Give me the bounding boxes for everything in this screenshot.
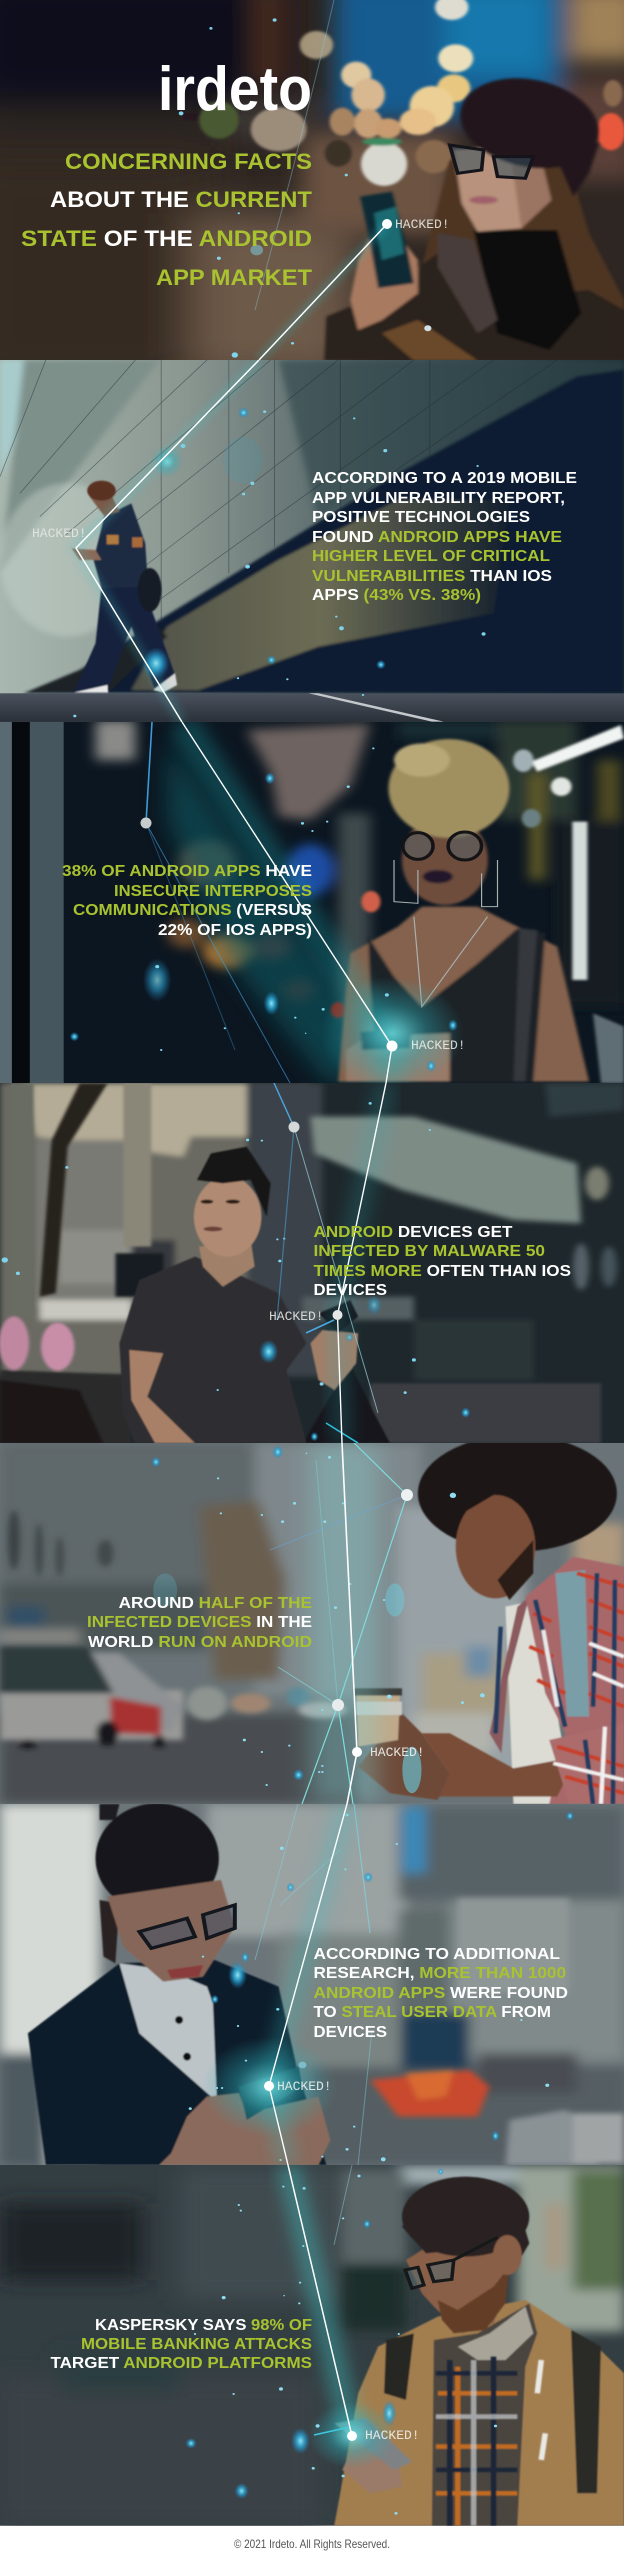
- fact text: MOBILE BANKING ATTACKS: [81, 2336, 312, 2353]
- fact text: ANDROID APPS WERE FOUND: [314, 1985, 568, 2002]
- fact text: POSITIVE TECHNOLOGIES: [312, 509, 530, 526]
- fact text: 38% OF ANDROID APPS HAVE: [62, 863, 312, 880]
- white network line: [342, 1443, 357, 1804]
- fact text: AROUND HALF OF THE: [119, 1595, 312, 1612]
- title: STATE OF THE ANDROID: [21, 226, 312, 251]
- fact text: APPS (43% VS. 38%): [312, 587, 481, 604]
- woman figure: [324, 64, 624, 361]
- hacked label: HACKED!: [32, 526, 87, 541]
- hacked label: HACKED!: [395, 217, 450, 232]
- glow: [308, 2402, 396, 2469]
- photo: woman in office: [0, 1803, 624, 2167]
- wall seams: [0, 360, 557, 620]
- fact text: ACCORDING TO ADDITIONAL: [314, 1946, 560, 1963]
- fact text: 22% OF IOS APPS): [158, 922, 312, 939]
- hacked label: HACKED!: [277, 2079, 332, 2094]
- white network line: [182, 722, 392, 1083]
- man figure: [119, 1147, 390, 1443]
- fact text: INFECTED DEVICES IN THE: [87, 1614, 312, 1631]
- fact text: KASPERSKY SAYS 98% OF: [95, 2317, 312, 2334]
- fact text: INSECURE INTERPOSES: [114, 883, 312, 900]
- node: [382, 219, 392, 229]
- secondary network lines: [255, 1804, 372, 2165]
- particles: [259, 1340, 278, 1364]
- fact text: INFECTED BY MALWARE 50: [314, 1243, 545, 1260]
- photo: woman at night with phone: [0, 0, 624, 387]
- photo: woman on night street: [0, 720, 624, 1090]
- fact text: FOUND ANDROID APPS HAVE: [312, 529, 562, 546]
- glow: [201, 2037, 337, 2137]
- panel: man with curly hair and coffee: [0, 1435, 624, 1804]
- fact text: DEVICES: [314, 1282, 387, 1299]
- fact text: ACCORDING TO A 2019 MOBILE: [312, 470, 577, 487]
- glow around phone node: [326, 980, 459, 1083]
- particles: [153, 448, 182, 476]
- white network line: [288, 2165, 352, 2436]
- title: APP MARKET: [156, 265, 313, 290]
- fact text: [62, 863, 312, 939]
- shirt plaid: [436, 2357, 545, 2526]
- hacked label: HACKED!: [269, 1309, 324, 1324]
- glow: [310, 1443, 378, 1803]
- logo: irdeto: [158, 55, 312, 124]
- secondary network lines: [270, 1443, 407, 1804]
- fact text: COMMUNICATIONS (VERSUS: [73, 902, 312, 919]
- fact text: [314, 1224, 571, 1299]
- photo: man walking: [0, 360, 624, 722]
- photo: bearded man with phone: [0, 2165, 624, 2527]
- fact text: [312, 470, 577, 604]
- fact text: RESEARCH, MORE THAN 1000: [314, 1965, 566, 1982]
- nodes: [140, 818, 398, 1052]
- glasses: [450, 145, 533, 178]
- secondary network lines: [274, 1083, 378, 1443]
- nodes: [332, 1489, 413, 1757]
- fact text: APP VULNERABILITY REPORT,: [312, 490, 565, 507]
- fact text: [50, 2317, 312, 2372]
- shirt plaid: [496, 1573, 624, 1804]
- node: [347, 2431, 357, 2441]
- panel: intro with woman and phone: [0, 0, 624, 387]
- fact text: TO STEAL USER DATA FROM: [314, 2004, 551, 2021]
- secondary network lines: [314, 2165, 352, 2435]
- fact text: ANDROID DEVICES GET: [314, 1224, 513, 1241]
- node: [264, 2081, 274, 2091]
- panel: man walking along wall: [0, 360, 624, 722]
- panel: woman with glasses in office: [0, 1803, 624, 2167]
- fact text: WORLD RUN ON ANDROID: [88, 1634, 312, 1651]
- hacked label: HACKED!: [365, 2428, 420, 2443]
- photo: man with coffee on street: [0, 1435, 624, 1804]
- white network line: [269, 1804, 347, 2165]
- fact text: TIMES MORE OFTEN THAN IOS: [314, 1263, 571, 1280]
- white network line: [76, 360, 259, 722]
- fact text: VULNERABILITIES THAN IOS: [312, 568, 552, 585]
- man figure: [353, 1435, 624, 1804]
- fact text: [314, 1946, 568, 2041]
- fact text: TARGET ANDROID PLATFORMS: [50, 2355, 312, 2372]
- white network line: [338, 1083, 386, 1443]
- photo: man sitting in station: [0, 1083, 624, 1443]
- fact text: DEVICES: [314, 2024, 387, 2041]
- secondary network lines: [255, 0, 334, 310]
- white network line: [259, 224, 387, 360]
- woman figure: [338, 739, 589, 1082]
- nodes: [288, 1122, 342, 1320]
- secondary network lines: [146, 722, 290, 1083]
- man figure: [334, 2177, 624, 2526]
- fact text: [87, 1595, 312, 1651]
- particles: [179, 18, 431, 358]
- panel: bearded man in tan coat: [0, 2165, 624, 2527]
- title: CONCERNING FACTS: [65, 149, 312, 174]
- woman figure: [28, 1803, 330, 2165]
- hacked label: HACKED!: [370, 1745, 425, 1760]
- panel: man in dark t-shirt: [0, 1083, 624, 1443]
- glasses and jewellery: [403, 832, 482, 860]
- glasses: [405, 2237, 498, 2288]
- man figure: [72, 481, 177, 693]
- fact text: HIGHER LEVEL OF CRITICAL: [312, 548, 550, 565]
- panel: woman with short curly hair: [0, 720, 624, 1090]
- hacked label: HACKED!: [411, 1038, 466, 1053]
- footer copyright: © 2021 Irdeto. All Rights Reserved.: [234, 2537, 390, 2551]
- title: [21, 149, 313, 290]
- glasses: [139, 1905, 235, 1948]
- title: ABOUT THE CURRENT: [50, 187, 313, 212]
